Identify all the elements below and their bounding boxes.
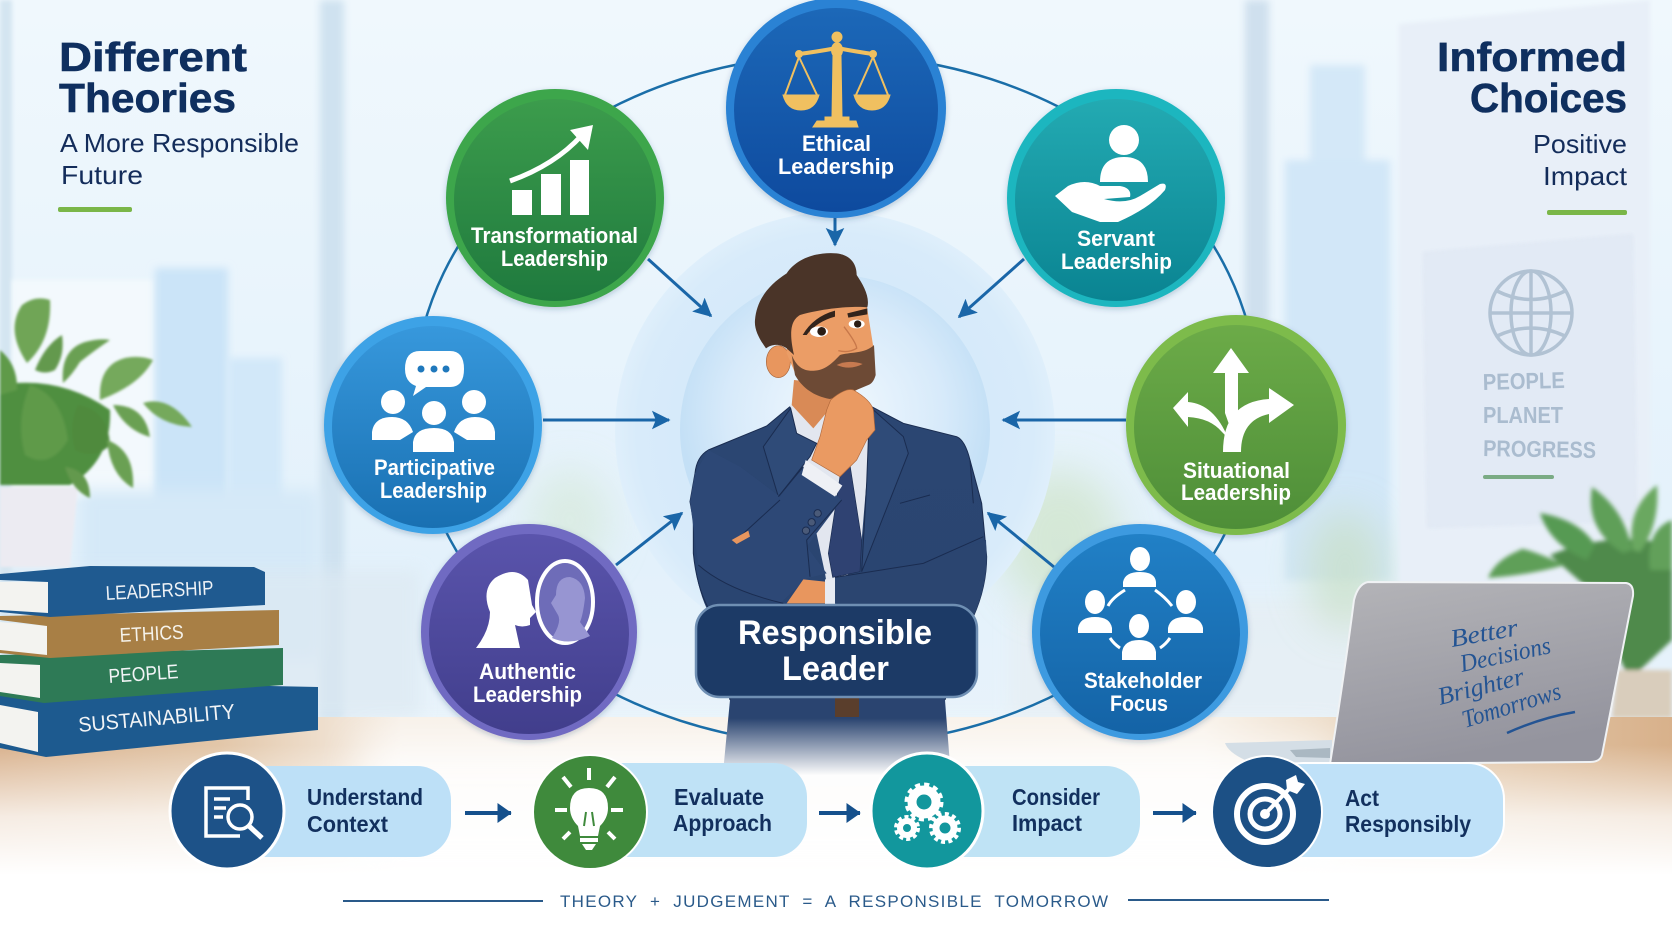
subtitle: positive impact: Impact <box>1543 161 1628 191</box>
tie <box>828 465 862 577</box>
crossed lower arm <box>835 540 987 617</box>
poster words: PEOPLE <box>1482 367 1565 395</box>
step 4: act responsibly: Responsibly <box>1345 811 1471 837</box>
label <box>473 659 582 707</box>
node: transformational leadership <box>446 89 664 307</box>
icon: target with arrow <box>1237 775 1305 842</box>
book: ethics <box>0 610 279 658</box>
label: Situational <box>1183 458 1290 483</box>
title: informed choices: Informed <box>1437 34 1627 80</box>
subtitle: positive impact <box>1533 129 1628 215</box>
subtitle: a more responsible future: A More Responsible <box>60 128 299 158</box>
arrow: step 3 to 4 <box>1153 811 1196 815</box>
hair <box>755 253 868 355</box>
label <box>1181 458 1291 505</box>
node: situational leadership <box>1126 315 1346 535</box>
poster words: PLANET <box>1483 402 1563 428</box>
laptop handwriting: Brighter <box>1435 663 1527 711</box>
arrows into the leader <box>543 213 1126 567</box>
raised forearm <box>690 450 842 603</box>
subtitle: positive impact: Positive <box>1533 129 1627 159</box>
nose <box>838 327 857 352</box>
label: Leadership <box>380 478 487 503</box>
beard <box>792 345 876 399</box>
man: thinking responsible leader <box>690 253 987 787</box>
subtitle: a more responsible future: Future <box>61 160 143 190</box>
label: Authentic <box>479 659 576 684</box>
icon: person in hand <box>1055 125 1166 222</box>
label: Focus <box>1110 691 1168 716</box>
node: servant leadership <box>1007 89 1225 307</box>
label: Leadership <box>1061 249 1172 274</box>
title: different theories: Different <box>59 34 247 80</box>
step 2: evaluate approach: Approach <box>673 810 772 836</box>
icon: diverging arrows <box>1173 348 1294 452</box>
poster words <box>1482 367 1596 463</box>
book: sustainability: SUSTAINABILITY <box>77 700 236 737</box>
label: Stakeholder <box>1084 668 1202 693</box>
right plant with pot <box>1488 485 1672 718</box>
step 2: evaluate approach <box>533 755 807 869</box>
label <box>1084 668 1202 716</box>
sleeve buttons <box>802 510 821 534</box>
book: leadership: LEADERSHIP <box>105 577 214 605</box>
title: different theories: Theories <box>59 75 236 121</box>
step 3: consider impact <box>871 753 1140 869</box>
step 1: understand context: Understand <box>307 784 423 810</box>
table surface <box>0 717 1672 941</box>
poster: people planet progress <box>1424 235 1636 527</box>
step 3: consider impact: Consider <box>1012 784 1100 810</box>
shirt <box>790 405 872 603</box>
label <box>374 455 495 503</box>
step 2: evaluate approach: Evaluate <box>674 784 764 810</box>
belt <box>835 697 859 717</box>
node: stakeholder focus <box>1032 524 1248 740</box>
label: Transformational <box>471 223 638 248</box>
eyebrows <box>803 311 835 335</box>
thinking hand <box>812 390 875 477</box>
arrow: step 1 to 2 <box>465 811 511 815</box>
laptop handwriting: Decisions <box>1457 632 1553 678</box>
icon: growth chart <box>510 125 593 215</box>
icon: scales <box>783 32 890 127</box>
stack of books <box>0 566 318 757</box>
subtitle: a more responsible future <box>58 128 299 212</box>
face <box>787 304 874 397</box>
node: authentic leadership <box>421 524 637 740</box>
connecting ring <box>414 55 1258 745</box>
label <box>778 131 894 179</box>
icon: person facing mirror <box>476 561 593 648</box>
central glow rings <box>615 212 1055 652</box>
label <box>471 223 638 271</box>
lapels <box>763 408 817 497</box>
icon: gears <box>896 785 959 842</box>
step 1: understand context: Context <box>307 811 388 837</box>
laptop handwriting <box>1435 614 1564 734</box>
label <box>1061 226 1172 274</box>
laptop <box>1225 582 1633 764</box>
label: Participative <box>374 455 495 480</box>
right wall panel <box>1399 0 1650 720</box>
label: Leadership <box>778 154 894 179</box>
laptop handwriting: Better <box>1448 614 1520 653</box>
neck <box>792 380 857 428</box>
book: people <box>0 648 283 703</box>
lower hand and cuff <box>787 579 825 603</box>
label: responsible leader <box>696 605 977 697</box>
step 4: act responsibly: Act <box>1345 785 1379 811</box>
tagline: THEORY + JUDGEMENT = A RESPONSIBLE TOMORROW <box>560 892 1108 911</box>
icon: stakeholder network <box>1078 547 1203 660</box>
label: Leadership <box>1181 480 1291 505</box>
left plant with pot <box>0 298 192 567</box>
label: Leadership <box>501 246 608 271</box>
eyes <box>810 326 828 337</box>
poster words: PROGRESS <box>1483 435 1596 463</box>
icon: globe <box>1490 271 1572 355</box>
label: Leadership <box>473 682 582 707</box>
arrow: step 2 to 3 <box>819 811 860 815</box>
book: leadership <box>0 566 265 617</box>
icon: group conversation <box>372 351 495 452</box>
title: different theories <box>59 34 247 121</box>
icon: document and magnifier <box>206 788 262 838</box>
node: ethical leadership <box>726 0 946 218</box>
suit body <box>690 407 987 787</box>
label: responsible leader: Leader <box>782 650 889 688</box>
book: ethics: ETHICS <box>119 622 184 647</box>
laptop handwriting: Tomorrows <box>1459 678 1564 734</box>
icon: light bulb <box>555 768 623 850</box>
label: Servant <box>1077 226 1156 251</box>
step 3: consider impact: Impact <box>1012 810 1082 836</box>
node: participative leadership <box>324 316 542 534</box>
title: informed choices: Choices <box>1470 75 1627 121</box>
ear <box>766 346 790 378</box>
step 1: understand context <box>170 753 451 869</box>
book: people: PEOPLE <box>108 661 179 688</box>
title: informed choices <box>1437 34 1627 121</box>
book: sustainability <box>0 686 318 757</box>
step 4: act responsibly <box>1212 756 1504 868</box>
label: Ethical <box>802 131 871 156</box>
label: responsible leader: Responsible <box>738 614 932 652</box>
cuff <box>802 460 842 497</box>
